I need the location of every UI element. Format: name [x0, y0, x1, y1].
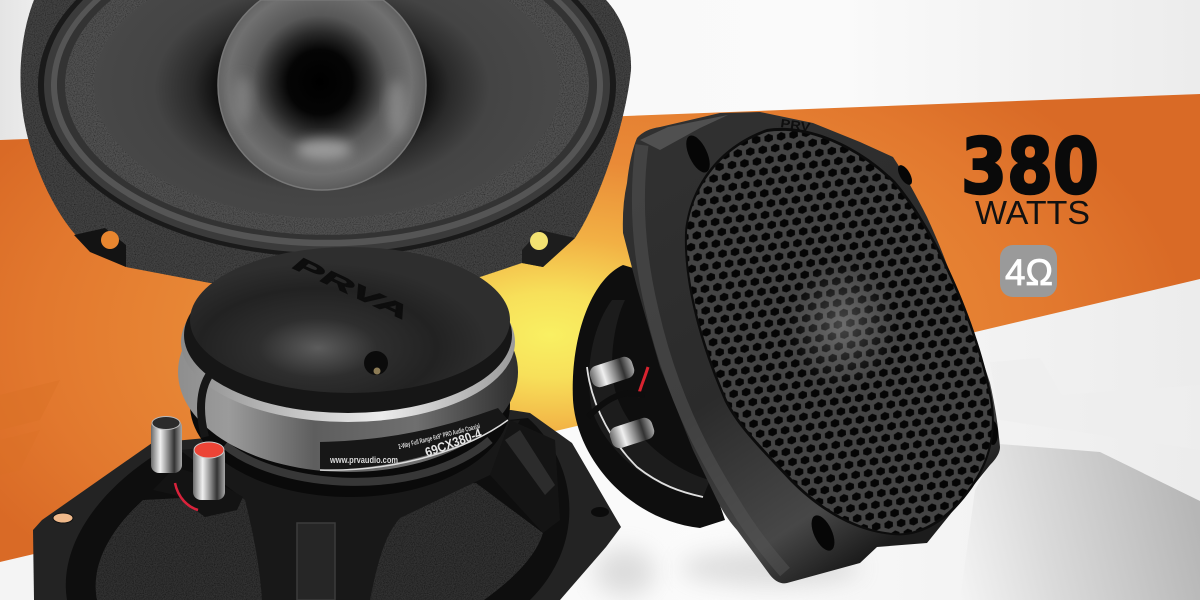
red wire: [638, 367, 648, 397]
ring edge highlight: [320, 420, 508, 470]
power value: 380: [961, 123, 1099, 212]
magnet back: [573, 265, 725, 528]
impedance value: 4Ω: [1005, 252, 1053, 293]
flange holes: [53, 507, 609, 523]
frame top lobe: [640, 115, 728, 150]
magnet inner: [589, 300, 710, 497]
terminal: left: [151, 416, 182, 473]
terminal: lower: [608, 416, 656, 450]
ring highlight: [225, 440, 490, 482]
silver ring: [178, 272, 518, 472]
right speaker: [573, 112, 1000, 586]
magnet top plate: [184, 257, 512, 413]
dome screw hole: [364, 351, 388, 375]
speaker shadow: [680, 550, 860, 586]
power rating: [961, 123, 1099, 231]
red wire: [175, 483, 198, 510]
top speaker: [20, 0, 631, 283]
speaker frame: [20, 0, 631, 283]
impedance badge: [1000, 245, 1057, 297]
bottom-left speaker: [33, 247, 655, 600]
power unit: WATTS: [975, 194, 1090, 231]
terminal: upper: [588, 355, 636, 389]
basket spokes: [180, 420, 560, 600]
basket mesh: [96, 483, 543, 600]
label text: www: www.prvaudio.com: [329, 455, 398, 466]
terminal: right: [193, 442, 225, 500]
basket flange: [33, 410, 621, 600]
frame highlight: [638, 145, 785, 572]
dome logo: PRVA: [290, 253, 412, 325]
product label: [320, 408, 508, 470]
label text: model: 69CX380-4: [423, 425, 484, 460]
mounting slots: [681, 132, 998, 554]
spoke slot: [297, 523, 335, 600]
grille: [685, 128, 994, 535]
speaker shadow: [595, 548, 655, 596]
frame: [623, 112, 1000, 583]
mounting tabs: [74, 228, 575, 267]
label text: product line: 2-Way Full Range 6x9" PRO Audio Coaxial: [398, 423, 481, 451]
surround rings: [38, 0, 616, 257]
basket rim: [66, 418, 569, 600]
cone: [94, 0, 560, 218]
dust cap: [218, 0, 426, 190]
wire: [201, 370, 213, 437]
magnet dome: [190, 247, 510, 393]
polished magnet arc: [587, 367, 703, 497]
lower magnet ring: [190, 313, 510, 497]
polished band: [181, 262, 515, 422]
black cable: [588, 393, 645, 417]
terminal block: [153, 467, 243, 517]
frame logo: PRV: [780, 116, 811, 134]
